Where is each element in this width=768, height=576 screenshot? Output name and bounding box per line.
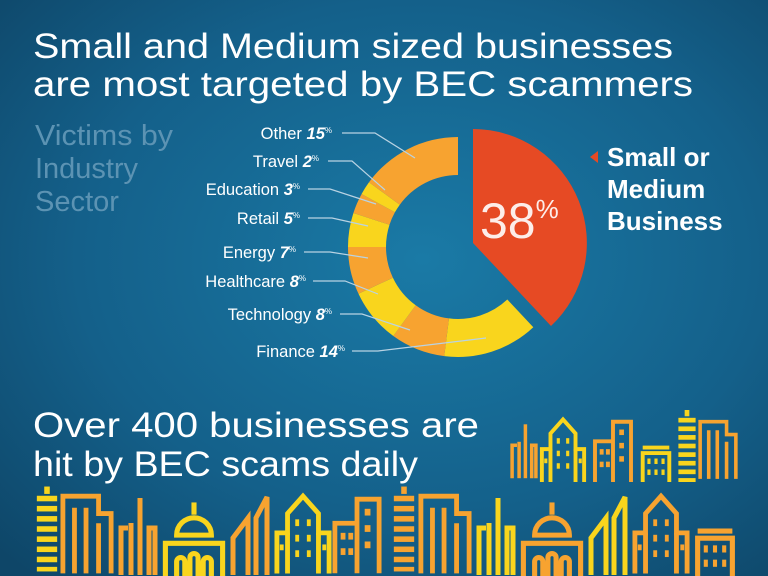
callout: small or medium business: Business [607,206,723,236]
sector labels: % [325,307,332,316]
sector labels: Finance 14 [256,343,338,361]
icon row: city skyline bottom [37,487,732,576]
label: 38%: % [536,194,559,224]
statement: over 400 businesses: hit by BEC scams daily [33,445,419,484]
sector labels: Technology 8 [228,306,325,324]
sector labels: % [312,154,319,163]
sector labels: Healthcare 8 [205,273,299,291]
statement: over 400 businesses: Over 400 businesses are [33,406,479,445]
title: are most targeted by BEC scammers [33,65,693,104]
statement: over 400 businesses [33,406,479,484]
callout: small or medium business [590,142,723,236]
subtitle: victims by industry sector [35,120,174,218]
sector labels: % [293,182,300,191]
icon row: city skyline top [512,410,736,482]
segment: small or medium business [473,129,587,326]
subtitle: victims by industry sector: Industry [35,153,138,185]
sector labels: % [338,344,345,353]
sector labels: Other 15 [261,125,325,143]
sector labels: % [289,245,296,254]
sector labels: Travel 2 [253,153,312,171]
sector labels: % [325,126,332,135]
title [33,27,693,104]
subtitle: victims by industry sector: Sector [35,186,119,218]
sector labels: Retail 5 [237,210,293,228]
donut chart [348,129,587,357]
sector labels: % [299,274,306,283]
sector labels [205,125,345,361]
subtitle: victims by industry sector: Victims by [35,120,174,152]
sector labels: % [293,211,300,220]
sector labels: Energy 7 [223,244,289,262]
sector labels: Education 3 [206,181,293,199]
leader lines [304,133,486,351]
label: 38%: 38 [480,193,536,249]
title: Small and Medium sized businesses [33,27,673,66]
callout: small or medium business: Medium [607,174,705,204]
callout: small or medium business: Small or [607,142,710,172]
